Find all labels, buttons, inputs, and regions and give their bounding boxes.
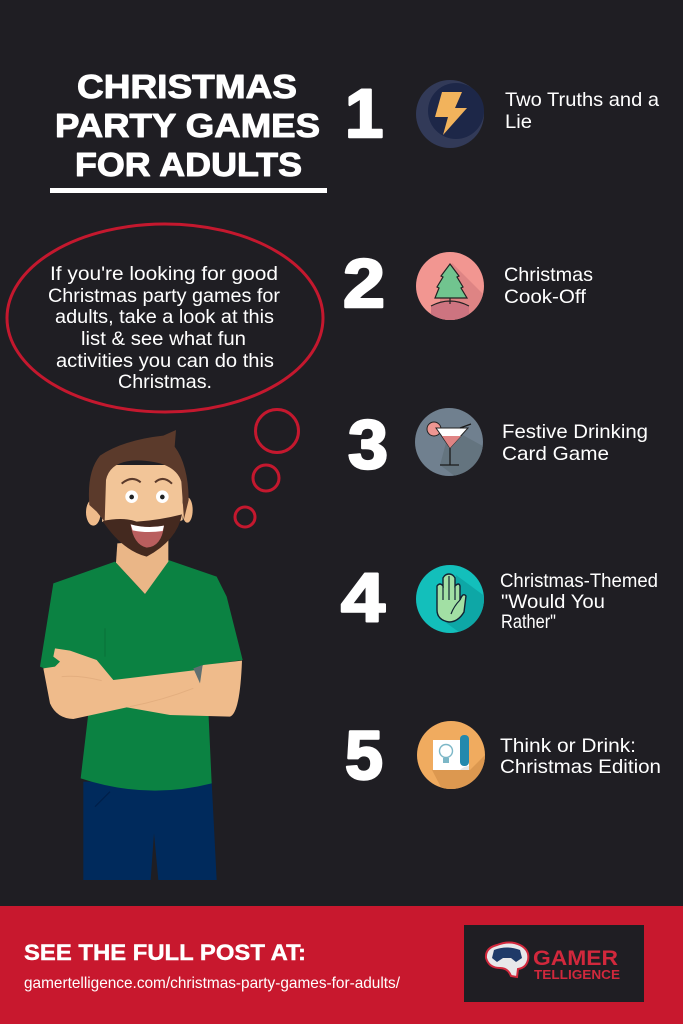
- icon: christmas tree: [416, 252, 484, 320]
- item 4: 4: [341, 559, 385, 636]
- item 2: Cook-Off: [504, 286, 587, 308]
- speech bubble: Christmas party games for: [48, 286, 281, 307]
- item 1: Lie: [505, 111, 532, 133]
- icon: raised hand: [416, 565, 484, 633]
- title: CHRISTMAS: [77, 68, 297, 105]
- item 3: Card Game: [502, 443, 609, 465]
- item 5: Christmas Edition: [500, 756, 661, 778]
- item 5: 5: [345, 717, 383, 794]
- item 2: Christmas: [504, 264, 593, 286]
- man illustration: [40, 430, 243, 880]
- thought bubbles: [235, 410, 298, 527]
- title: FOR ADULTS: [75, 146, 302, 183]
- item 3: Festive Drinking: [502, 421, 648, 443]
- footer heading: SEE THE FULL POST AT:: [24, 940, 306, 965]
- footer url: gamertelligence.com/christmas-party-games-for-adults/: [24, 975, 401, 992]
- speech bubble: activities you can do this: [56, 351, 274, 372]
- item 4: Rather": [501, 611, 556, 633]
- item 1: [345, 75, 659, 152]
- title: [50, 68, 327, 193]
- item 3: [348, 408, 647, 476]
- logo: GAMER: [533, 947, 618, 970]
- item 1: 1: [345, 75, 383, 152]
- item 4: [340, 565, 657, 633]
- speech bubble: list & see what fun: [81, 329, 246, 350]
- icon: lightbulb blueprint: [417, 721, 485, 789]
- logo: TELLIGENCE: [534, 968, 620, 982]
- item 1: Two Truths and a: [505, 89, 659, 111]
- item 5: Think or Drink:: [500, 735, 636, 757]
- item 3: 3: [348, 406, 388, 483]
- item 2: 2: [343, 245, 385, 322]
- item 4: "Would You: [501, 591, 605, 613]
- logo brain icon: [486, 942, 528, 977]
- speech bubble: [7, 224, 323, 412]
- icon: lightning bolt: [416, 80, 484, 148]
- logo: [464, 925, 644, 1002]
- title: PARTY GAMES: [55, 107, 320, 144]
- footer band: [0, 906, 683, 1024]
- icon: cocktail glass: [415, 408, 483, 476]
- speech bubble: adults, take a look at this: [55, 307, 274, 328]
- speech bubble: Christmas.: [118, 372, 212, 393]
- speech bubble: If you're looking for good: [50, 264, 278, 285]
- item 2: [344, 252, 592, 320]
- item 4: Christmas-Themed: [500, 570, 658, 592]
- item 5: [346, 721, 660, 789]
